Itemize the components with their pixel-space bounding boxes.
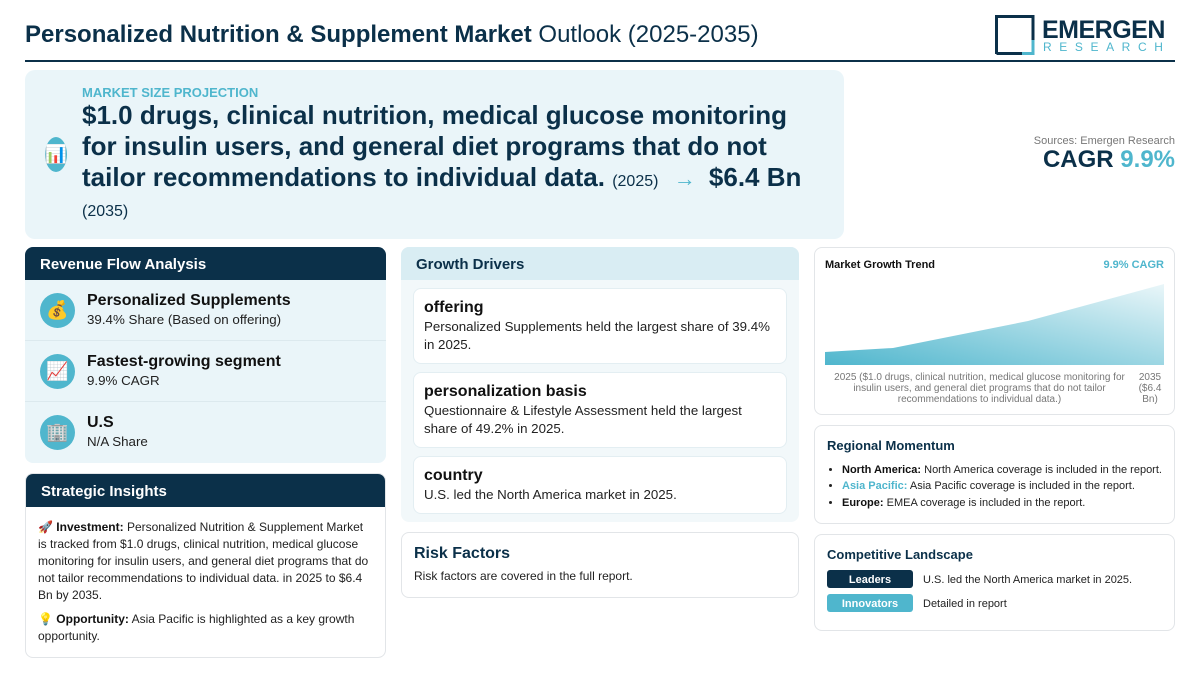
driver: personalization basis: personalization basis: [424, 383, 587, 400]
heading: market growth trend: Market Growth Trend: [825, 259, 935, 271]
heading: growth drivers: [401, 247, 799, 280]
driver: country: U.S. led the North America market in 2025.: [424, 487, 677, 502]
axis label: 2025: 2025 ($1.0 drugs, clinical nutrition, medical glucose monitoring for insulin users, and general diet programs that do not tailor recommendations to individual data.): [834, 372, 1125, 404]
region list: North America: North America coverage is included in the report.: [842, 464, 1162, 476]
badge: leaders: [827, 570, 913, 588]
item: personalized supplements: [25, 280, 386, 341]
source and CAGR: Sources: Emergen Research: [1034, 135, 1175, 147]
source and CAGR: CAGR 9.9%: [1043, 146, 1175, 173]
logo: Emergen Research: RESEARCH: [1043, 40, 1170, 54]
heading: strategic insights: Strategic Insights: [41, 483, 167, 500]
projection headline: $1.0 drugs, clinical nutrition, medical glucose monitoring: [82, 100, 787, 130]
heading: strategic insights: [26, 474, 385, 507]
item: U.S: N/A Share: [87, 434, 148, 449]
projection headline: tailor recommendations to individual data. (2025) → $6.4 Bn: [82, 162, 801, 192]
heading: competitive landscape: Competitive Landscape: [827, 547, 973, 562]
panel: revenue flow analysis: [25, 247, 386, 463]
insight: opportunity: 💡 Opportunity: Asia Pacific is highlighted as a key growth opportunity.: [38, 612, 354, 643]
region list: [829, 464, 1162, 508]
region list: Asia Pacific: Asia Pacific coverage is included in the report.: [842, 480, 1135, 492]
driver: country: [413, 456, 787, 514]
projection headline: for insulin users, and general diet programs that do not: [82, 131, 767, 161]
panel: market size projection: [25, 70, 844, 239]
panel: strategic insights: [25, 473, 386, 658]
leaders text: U.S. led the North America market in 2025.: [923, 574, 1132, 586]
item: fastest-growing segment: 9.9% CAGR: [87, 373, 160, 388]
panel: competitive landscape: [814, 534, 1175, 631]
region list: Europe: EMEA coverage is included in the report.: [842, 496, 1085, 508]
CAGR label: 9.9% CAGR: [1103, 259, 1164, 271]
innovators text: Detailed in report: [923, 598, 1007, 610]
badge: leaders: Leaders: [849, 574, 891, 586]
item: personalized supplements: 39.4% Share (Based on offering): [87, 312, 281, 327]
icon: office building: [40, 415, 75, 450]
logo: Emergen Research: EMERGEN: [1042, 16, 1165, 44]
heading: revenue flow analysis: Revenue Flow Analysis: [40, 256, 206, 273]
header rule: [25, 60, 1175, 62]
driver: personalization basis: Questionnaire & Lifestyle Assessment held the largest share of 49.2% in 2025.: [424, 403, 742, 436]
driver: offering: Personalized Supplements held the largest share of 39.4% in 2025.: [424, 319, 770, 352]
icon: trend chart: 📈: [46, 361, 69, 381]
heading: regional momentum: Regional Momentum: [827, 438, 955, 453]
title: Personalized Nutrition & Supplement Market Outlook (2025-2035): [25, 21, 759, 48]
icon: office building: 🏢: [46, 422, 69, 442]
source and CAGR: [1034, 135, 1175, 173]
badge: innovators: Innovators: [842, 598, 898, 610]
label: market size projection: MARKET SIZE PROJECTION: [82, 85, 258, 100]
item: U.S: U.S: [87, 414, 114, 431]
item: personalized supplements: Personalized Supplements: [87, 292, 291, 309]
driver: offering: offering: [424, 299, 484, 316]
icon: bar chart: [45, 137, 67, 172]
axis label: 2035: 2035 ($6.4 Bn): [1139, 372, 1161, 404]
item: fastest-growing segment: Fastest-growing segment: [87, 353, 281, 370]
driver: personalization basis: [413, 372, 787, 448]
icon: bar chart: 📊: [45, 144, 67, 164]
driver: offering: [413, 288, 787, 364]
panel: growth drivers: [401, 247, 799, 522]
item: fastest-growing segment: [25, 341, 386, 402]
area chart: [825, 284, 1164, 365]
icon: trend chart: [40, 354, 75, 389]
heading: growth drivers: Growth Drivers: [416, 256, 524, 273]
projection headline: [82, 100, 801, 220]
projection headline: (2035): [82, 203, 128, 220]
panel: regional momentum: [814, 425, 1175, 524]
insight: investment: 🚀 Investment: Personalized Nutrition & Supplement Market is tracked from $1.0 drugs, clinical nutrition, medical glucose monitoring for insulin users, and general diet programs that do not tailor recommendations to individual data. in 2025 to $6.4 Bn by 2035.: [38, 520, 368, 602]
item: U.S: [40, 414, 148, 450]
icon: money bag: [40, 293, 75, 328]
heading: revenue flow analysis: [25, 247, 386, 280]
badge: innovators: [827, 594, 913, 612]
risk text: Risk factors are covered in the full report.: [414, 569, 633, 583]
heading: risk factors: Risk Factors: [414, 545, 510, 562]
driver: country: country: [424, 467, 483, 484]
icon: money bag: 💰: [46, 300, 69, 320]
panel: market growth trend: [814, 247, 1175, 415]
panel: risk factors: [401, 532, 799, 598]
logo: Emergen Research: [995, 15, 1170, 55]
